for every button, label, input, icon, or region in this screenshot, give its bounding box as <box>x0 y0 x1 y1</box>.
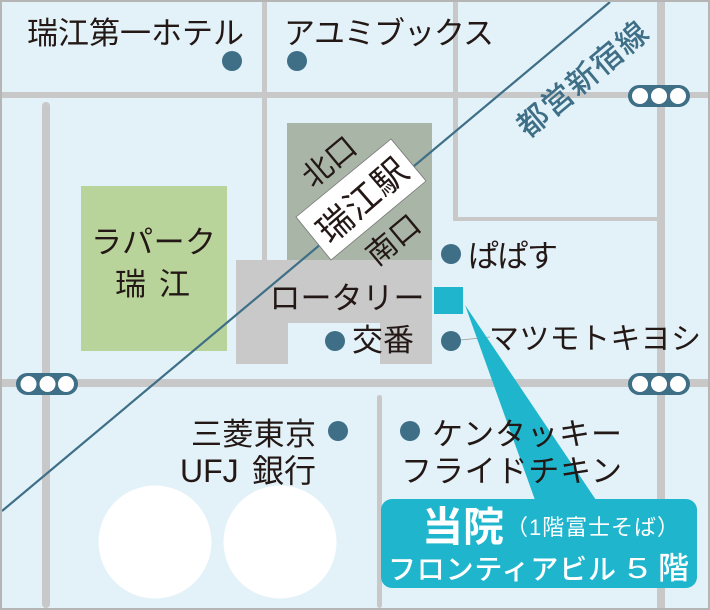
landmark: アユミブックス: アユミブックス <box>284 16 494 51</box>
callout: clinic location: 当院 <box>422 504 504 550</box>
railway line: 都営新宿線 <box>2 2 610 511</box>
station label: 瑞江駅 <box>296 139 426 260</box>
landmark: 交番 <box>325 323 414 358</box>
landmark: ケンタッキーフライドチキン: ケンタッキー <box>432 417 622 452</box>
landmark: 三菱東京UFJ銀行 <box>180 417 348 489</box>
pointer to clinic <box>434 287 596 500</box>
landmark: ケンタッキーフライドチキン <box>400 417 622 489</box>
landmark: ぱぱす: ぱぱす <box>468 239 558 274</box>
rotary <box>236 260 432 364</box>
north exit label: 北口 <box>296 131 363 194</box>
park: ラパーク瑞江 <box>81 186 227 351</box>
callout: clinic location: 5 <box>627 553 648 585</box>
park: ラパーク瑞江: ラパーク <box>91 225 216 260</box>
traffic signal: right <box>628 373 690 395</box>
rotary: ロータリー <box>270 281 424 316</box>
landmark: 瑞江第一ホテル: 瑞江第一ホテル <box>27 16 244 51</box>
callout: clinic location: （1階富士そば） <box>506 515 679 540</box>
station label: 瑞江駅: 瑞江駅 <box>310 151 416 251</box>
south exit label: 南口 <box>360 209 427 272</box>
callout: clinic location: フロンティアビル <box>388 554 616 585</box>
landmark: 交番: 交番 <box>352 323 414 358</box>
station area <box>287 123 432 260</box>
white circles <box>98 486 336 598</box>
landmark: 三菱東京UFJ銀行: 銀行 <box>252 453 316 489</box>
traffic signal: top right <box>628 85 690 107</box>
landmark: ケンタッキーフライドチキン: フライドチキン <box>401 454 622 489</box>
landmark: 瑞江第一ホテル <box>27 16 244 71</box>
park: ラパーク瑞江: 江 <box>159 267 190 302</box>
landmark: 三菱東京UFJ銀行: UFJ <box>180 453 239 489</box>
landmark: マツモトキヨシ: マツモトキヨシ <box>489 323 701 356</box>
callout: clinic location: 階 <box>658 551 689 586</box>
line label: 都営新宿線: 都営新宿線 <box>510 15 655 144</box>
traffic signal: left <box>16 373 78 395</box>
landmark: 三菱東京UFJ銀行: 三菱東京 <box>191 417 316 452</box>
callout: clinic location <box>381 499 697 588</box>
park: ラパーク瑞江: 瑞 <box>115 267 146 302</box>
landmark: アユミブックス <box>284 16 494 71</box>
